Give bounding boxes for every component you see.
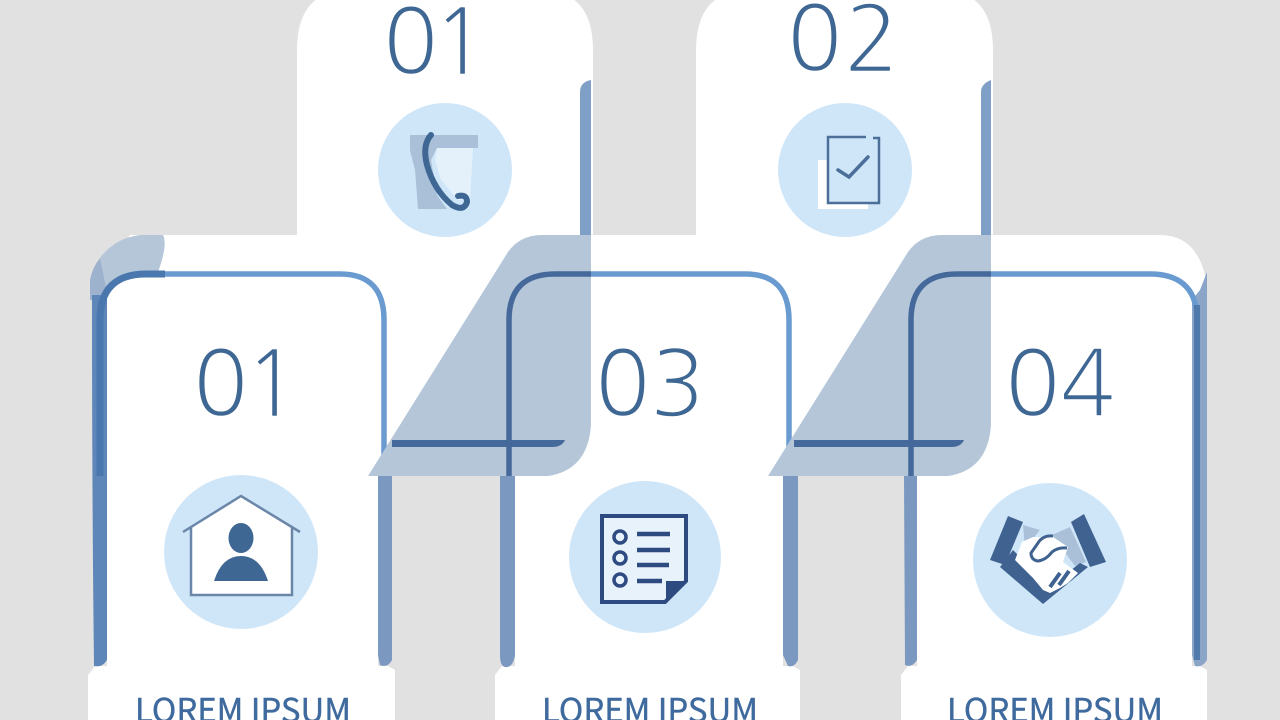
fold card outline [509,274,591,476]
top card 02 icon circle [778,103,912,237]
lower card 01 right bar [378,476,392,666]
lower card 04 right bar [1192,272,1207,666]
lower card 01 outline dark section [100,274,165,476]
icon: telephone [410,135,478,209]
fold shade shape [368,235,591,476]
lower card 04 right outline dark section [1194,305,1200,660]
panel: top card 01 [297,0,593,240]
lower card 01 left bar [92,295,107,666]
lower card 01 corner shade dark [90,258,106,300]
top card 01 side bar [580,80,591,235]
lower card 03 left bar [500,476,515,667]
fold shade between cards 03 and 04 [768,235,991,476]
icon: person in house [183,496,300,595]
lower card 03 number: 03 [595,339,705,430]
top card 01 body [297,0,593,240]
fold horizontal line [392,440,565,447]
fold shade shape [768,235,991,476]
panel: lower card 03 [495,270,800,720]
lower card 01 footer [88,666,395,720]
fold shade between cards 01 and 03 [368,235,591,476]
panel: lower card 04 [901,270,1207,720]
lower card 04 footer [901,666,1207,720]
fold card outline [911,274,991,476]
lower card 03 outline [509,274,789,476]
icon: handshake [990,514,1106,604]
white band joining the lower cards [107,235,1205,476]
top card 02 side bar [981,80,991,235]
lower card 03 column [515,270,783,670]
lower card 04 column [917,270,1192,670]
top card 02 body [696,0,993,240]
lower card 01 column [107,270,378,670]
lower card 01 icon circle [164,475,318,629]
lower card 01 corner shade [100,235,165,287]
lower card 04 left bar [904,476,917,666]
panel: lower card 01 [88,235,395,720]
lower card 04 number: 04 [1005,339,1115,430]
lower card 04 icon circle [973,483,1127,637]
panel: top card 02 [696,0,993,240]
top card 01 icon circle [378,103,512,237]
lower card 03 right bar [783,476,798,666]
lower card 01 number: 01 [193,339,295,430]
icon: checklist page [818,137,879,209]
icon: document list [602,516,687,603]
lower card 04 outline [911,274,1197,476]
fold horizontal line [794,440,964,447]
lower card 01 outline [100,274,384,476]
lower card 03 icon circle [569,481,721,633]
lower card 03 footer [495,666,800,720]
